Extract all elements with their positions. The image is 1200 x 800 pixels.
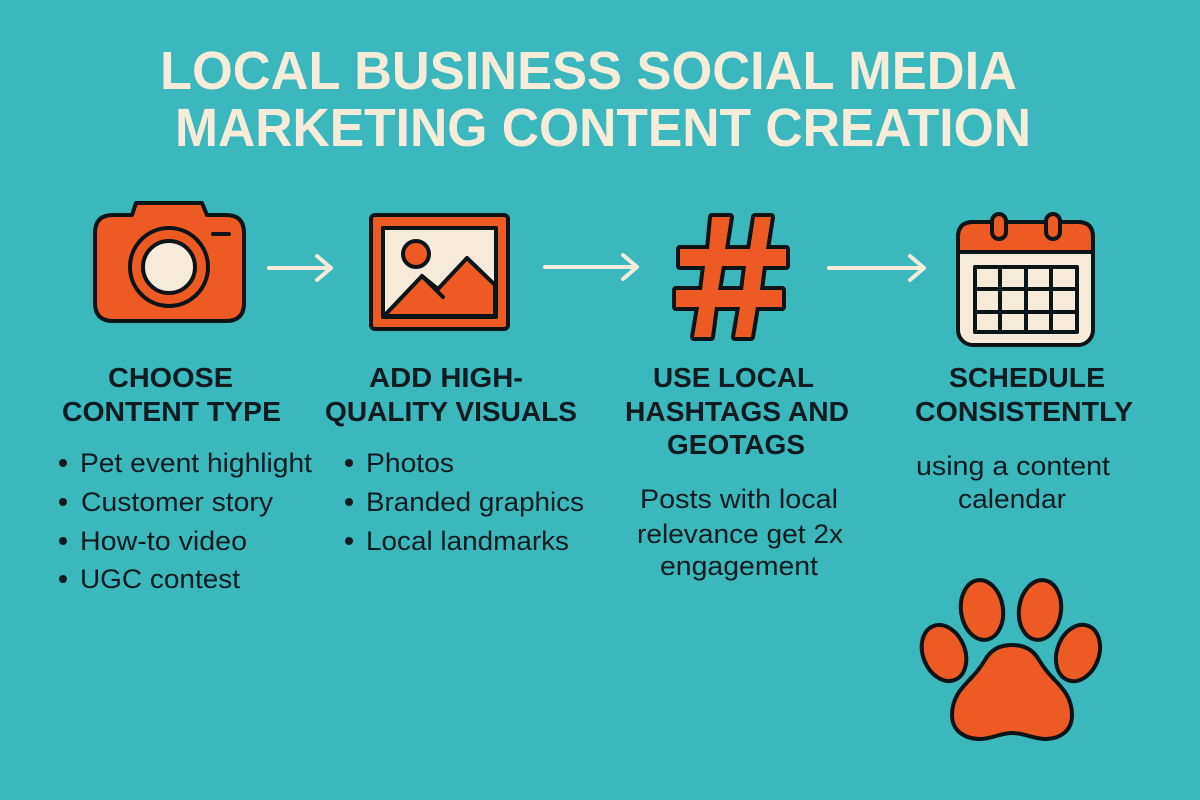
icon: calendar — [958, 214, 1093, 345]
step 2 heading — [325, 362, 577, 427]
step 4 text: calendar — [958, 484, 1066, 514]
arrow: step 3 to step 4 — [829, 256, 924, 280]
step 2 heading: ADD HIGH- — [369, 362, 523, 393]
step 1 list: UGC contest — [80, 564, 241, 594]
step 1 list: Customer story — [81, 487, 274, 517]
step 2 list: Photos — [366, 448, 454, 478]
step 1 heading: CONTENT TYPE — [62, 396, 281, 427]
step 3 text: engagement — [660, 551, 819, 581]
title: MARKETING CONTENT CREATION — [175, 98, 1031, 158]
arrow: step 2 to step 3 — [545, 255, 637, 279]
icon: paw print — [914, 577, 1108, 739]
step 1 list: Pet event highlight — [80, 448, 313, 478]
step 2 list: Branded graphics — [366, 487, 584, 517]
step 4 heading: CONSISTENTLY — [915, 396, 1133, 427]
title: LOCAL BUSINESS SOCIAL MEDIA — [160, 41, 1017, 101]
step 4 heading: SCHEDULE — [949, 362, 1105, 393]
icon: camera — [95, 203, 244, 321]
step 2 list — [345, 448, 584, 556]
icon: hashtag — [676, 217, 786, 337]
step 1 heading — [62, 362, 281, 427]
step 1 list: How-to video — [80, 526, 247, 556]
step 3 text: Posts with local — [640, 484, 838, 514]
arrow: step 1 to step 2 — [269, 256, 331, 280]
step 3 text — [637, 484, 844, 581]
title — [160, 41, 1031, 158]
step 4 text: using a content — [916, 451, 1111, 481]
step 3 heading: HASHTAGS AND — [625, 396, 849, 427]
step 3 heading — [625, 362, 849, 460]
step 3 heading: GEOTAGS — [667, 429, 805, 460]
step 2 heading: QUALITY VISUALS — [325, 396, 577, 427]
step 4 heading — [915, 362, 1133, 427]
step 2 list: Local landmarks — [366, 526, 569, 556]
icon: picture — [371, 215, 508, 329]
step 1 heading: CHOOSE — [108, 362, 233, 393]
step 3 heading: USE LOCAL — [653, 362, 814, 393]
step 3 text: relevance get 2x — [637, 519, 844, 549]
step 1 list — [59, 448, 313, 594]
step 4 text — [916, 451, 1111, 514]
